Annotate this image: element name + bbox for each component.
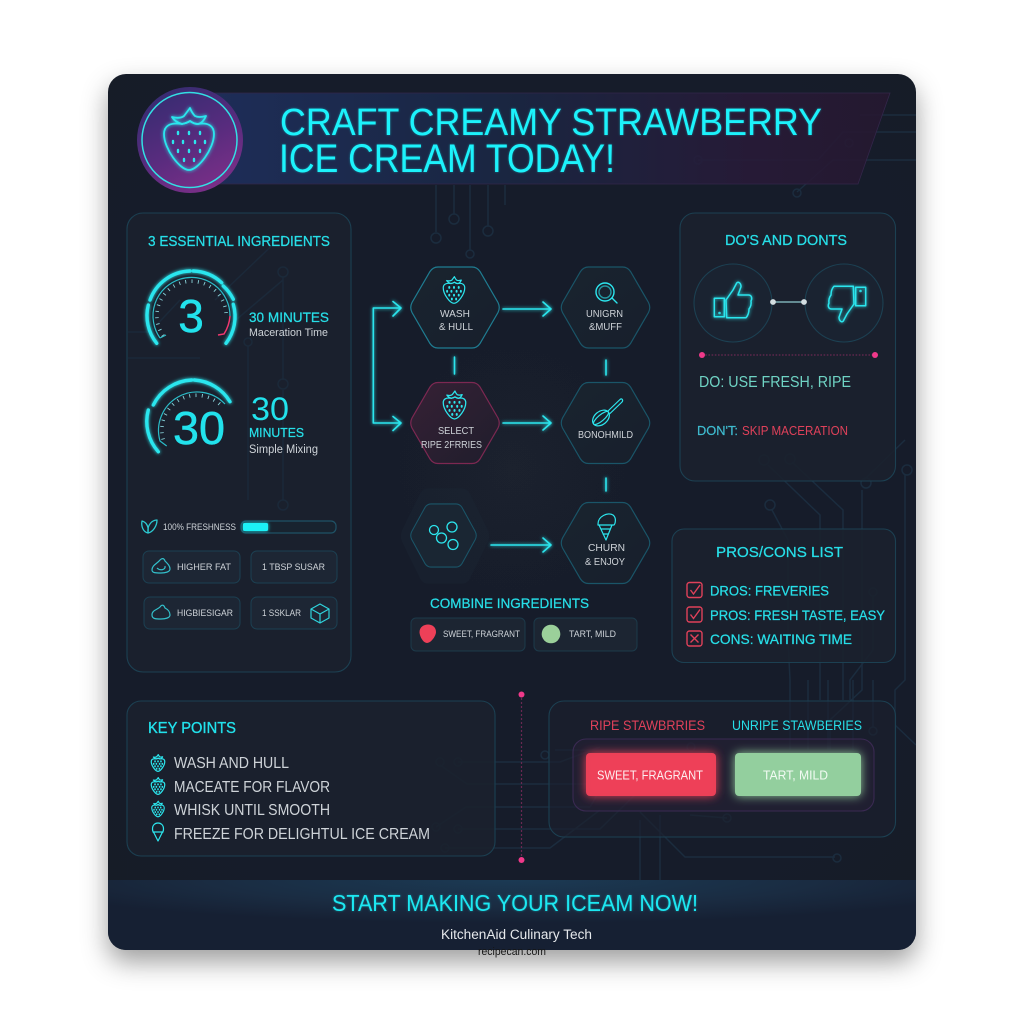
label: simple mixing: 30	[251, 391, 289, 427]
row: pro two: PROS: FRESH TASTE, EASY	[710, 607, 886, 623]
footer brand: KitchenAid Culinary Tech	[441, 927, 592, 942]
step: churn and enjoy: CHURN	[588, 542, 625, 554]
gauge: 3	[147, 271, 235, 343]
swatch: sweet fragrant: SWEET, FRAGRANT	[597, 768, 703, 782]
progress bar	[241, 521, 336, 533]
step: unigrn and muff	[561, 267, 650, 348]
freshness label: 100% FRESHNESS	[163, 522, 236, 532]
heading: key points: KEY POINTS	[148, 720, 236, 737]
label: simple mixing: Simple Mixing	[249, 444, 318, 456]
icon: thumbs down	[805, 264, 883, 342]
don't text	[697, 424, 848, 438]
call to action: START MAKING YOUR ICEAM NOW!	[332, 890, 698, 916]
chip: tbsp sugar: 1 TBSP SUSAR	[262, 562, 325, 573]
pink vertical connector	[518, 692, 524, 863]
heading: ripe: RIPE STAWBRRIES	[590, 717, 705, 733]
step: unigrn and muff: &MUFF	[589, 321, 622, 333]
item: freeze: FREEZE FOR DELIGHTUL ICE CREAM	[174, 826, 430, 843]
don't text: DON'T:	[697, 424, 738, 438]
step: wash and hull	[411, 267, 499, 348]
chip: higher fat: HIGHER FAT	[177, 562, 231, 573]
chip: higher sugar: HIGBIESIGAR	[177, 608, 233, 619]
circuit traces behind gauges	[128, 235, 288, 510]
step: churn and enjoy	[561, 502, 650, 584]
chip: sweet fragrant	[411, 618, 525, 651]
step: churn and enjoy: & ENJOY	[585, 556, 625, 568]
swatch: tart mild: TART, MILD	[763, 768, 828, 782]
do text: DO: USE FRESH, RIPE	[699, 374, 851, 391]
comparison tray	[573, 739, 874, 811]
icon: cream dollop	[152, 605, 170, 619]
gauge: 30	[147, 380, 230, 454]
icon: magnifier	[596, 283, 617, 303]
pink divider	[699, 352, 878, 358]
footer band	[108, 879, 916, 950]
label: maceration time	[249, 309, 329, 339]
label: simple mixing	[249, 391, 318, 456]
heading: essential ingredients: 3 ESSENTIAL INGREDIENTS	[148, 234, 330, 250]
connector	[770, 299, 807, 305]
step: whisk	[561, 382, 650, 464]
title: ICE CREAM TODAY!	[279, 137, 615, 181]
label: simple mixing: MINUTES	[249, 425, 304, 440]
circuit board background	[431, 115, 916, 880]
heading: combine ingredients: COMBINE INGREDIENTS	[430, 595, 589, 611]
icon: red swatch	[420, 624, 436, 643]
chip: higher fat	[143, 551, 240, 583]
step: combine (berries)	[401, 488, 489, 584]
chip: tbsp sugar	[251, 551, 337, 583]
chip: sugar cube	[251, 597, 337, 629]
panel: ripe vs unripe	[549, 701, 896, 837]
step: unigrn and muff: UNIGRN	[586, 308, 623, 320]
chip: sugar cube: 1 SSKLAR	[262, 608, 301, 619]
icon: cream swirl	[152, 559, 170, 573]
chip: tart mild: TART, MILD	[569, 629, 616, 639]
icon: pink strawberry	[443, 391, 466, 419]
flowchart arrows	[373, 302, 606, 552]
header banner	[137, 87, 890, 193]
card background	[108, 74, 916, 950]
panel: ingredients	[127, 213, 351, 672]
icon: whisk	[590, 399, 623, 429]
don't text: SKIP MACERATION	[742, 424, 848, 438]
panel: key points	[127, 701, 495, 856]
swatch: tart mild	[735, 753, 861, 796]
source url: recipecan.com	[478, 946, 546, 958]
title	[279, 102, 822, 181]
heading: do's and don'ts: DO'S AND DONTS	[725, 232, 847, 249]
icon: strawberry	[443, 277, 465, 303]
icon: strawberry badge	[137, 87, 243, 193]
icon: green swatch	[542, 625, 560, 643]
panel: do's and don'ts	[680, 213, 896, 481]
gauge: 3: 3	[178, 290, 204, 342]
heading: pros/cons list: PROS/CONS LIST	[716, 544, 843, 561]
gauge: 30: 30	[173, 402, 225, 454]
item: whisk: WHISK UNTIL SMOOTH	[174, 802, 330, 819]
icon: leaves	[142, 520, 157, 533]
label: maceration time: Maceration Time	[249, 327, 328, 339]
label: maceration time: 30 MINUTES	[249, 309, 329, 325]
step: wash and hull: & HULL	[439, 321, 473, 333]
step: whisk: BONOHMILD	[578, 430, 633, 441]
chip: sweet fragrant: SWEET, FRAGRANT	[443, 629, 520, 639]
icon: berries	[430, 522, 458, 550]
icon: thumbs up	[694, 264, 772, 342]
chip: tart mild	[534, 618, 637, 651]
item: wash and hull: WASH AND HULL	[174, 755, 289, 772]
step: select ripe berries	[411, 382, 499, 464]
chip: higher sugar	[144, 597, 240, 629]
icon: cube	[311, 604, 329, 623]
icon: ice cream cone	[598, 514, 615, 540]
row: pro one: DROS: FREVERIES	[710, 582, 829, 598]
title: CRAFT CREAMY STRAWBERRY	[280, 102, 822, 144]
heading: unripe: UNRIPE STAWBERIES	[732, 717, 862, 733]
step: select ripe berries: SELECT	[438, 425, 475, 437]
step: wash and hull: WASH	[440, 308, 470, 320]
row: con: CONS: WAITING TIME	[710, 631, 852, 647]
panel: pros and cons	[672, 529, 896, 662]
swatch: sweet fragrant	[586, 753, 716, 796]
item: macerate: MACEATE FOR FLAVOR	[174, 779, 330, 796]
step: select ripe berries: RIPE 2FRRIES	[421, 439, 482, 451]
